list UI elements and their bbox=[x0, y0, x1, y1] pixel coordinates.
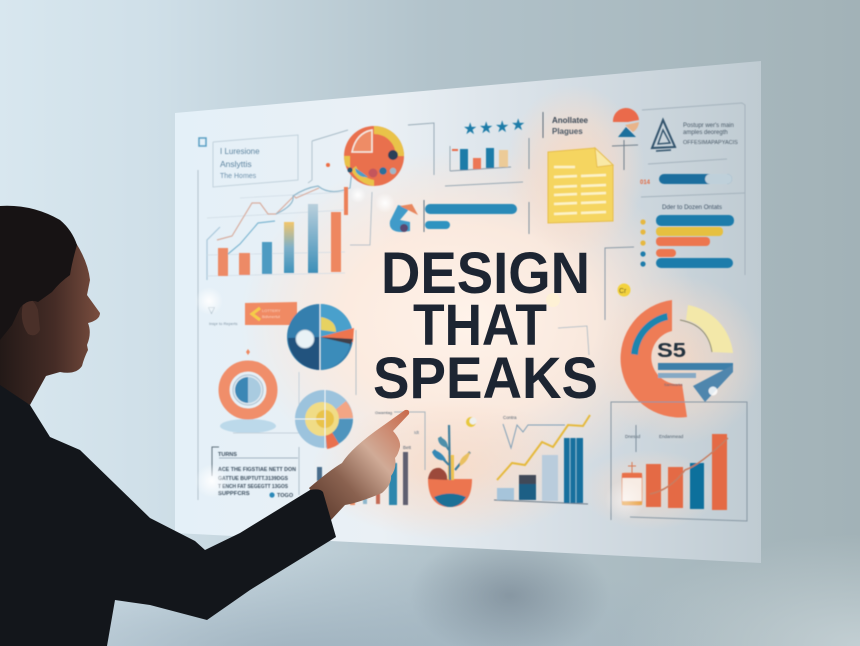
jacket bbox=[0, 385, 336, 646]
pie chart: blue bbox=[287, 304, 354, 370]
small yellow badge: Cr bbox=[619, 288, 627, 295]
panel: text notes: GATTUE BUPTUTT.3139DGS bbox=[218, 476, 288, 482]
panel: analytics heading bbox=[199, 135, 298, 187]
yellow document icon bbox=[548, 148, 613, 223]
annotation label: Plagues bbox=[552, 127, 583, 136]
potted plant illustration bbox=[428, 417, 477, 507]
rising growth chart bbox=[494, 415, 590, 504]
horizontal bar list bbox=[640, 193, 745, 268]
annotation label bbox=[543, 112, 589, 138]
donut chart: orange bbox=[220, 349, 299, 433]
poster sheet bbox=[175, 61, 765, 563]
bar chart with jar: Endanmead bbox=[659, 434, 684, 439]
small yellow badge bbox=[605, 247, 634, 320]
rating stars bbox=[463, 117, 525, 138]
radial chart bbox=[295, 389, 353, 449]
pie chart: top centre bbox=[308, 123, 434, 186]
decorative frame lines bbox=[198, 170, 589, 500]
blue icon and bars bbox=[390, 200, 529, 234]
panel: text notes: TOGO bbox=[277, 493, 294, 499]
panel: analytics heading: I Luresione bbox=[220, 147, 260, 156]
rating stars: ★ bbox=[511, 117, 525, 134]
hair bbox=[0, 206, 77, 340]
panel: text notes: TURNS bbox=[218, 452, 237, 458]
panel: text notes: ACE THE FIGSTIAE NETT DON bbox=[218, 467, 296, 473]
small pie icon bbox=[612, 108, 639, 170]
poster infographic widgets bbox=[198, 103, 747, 521]
title: THAT bbox=[413, 293, 547, 358]
large donut gauge: Samwarks bbox=[664, 382, 683, 387]
title: SPEAKS bbox=[373, 346, 598, 411]
person pointing bbox=[0, 206, 409, 646]
horizontal bar list: Dder to Dozen Ontats bbox=[662, 205, 722, 211]
small bar chart bbox=[445, 138, 529, 186]
title: DESIGN bbox=[381, 241, 590, 306]
panel: triangle logo note: Postupr wer's main bbox=[683, 123, 734, 129]
bars behind the hand: Gwamtag bbox=[375, 410, 392, 415]
bars behind the hand bbox=[317, 410, 425, 505]
panel: triangle logo note: OFFESIMAPAPYACIS bbox=[683, 140, 738, 146]
bar chart with jar bbox=[611, 402, 747, 521]
progress bar: 014 bbox=[640, 180, 651, 186]
panel: triangle logo note bbox=[642, 103, 745, 275]
hand bbox=[309, 410, 409, 520]
bar chart with jar: Dnessd bbox=[625, 434, 641, 439]
orange callout tag bbox=[208, 302, 297, 326]
bars behind the hand: Idt bbox=[414, 430, 420, 435]
panel: triangle logo note: amples deoregth bbox=[683, 130, 728, 136]
orange callout tag: Inspr to Reperts bbox=[209, 321, 237, 326]
rating stars: ★ bbox=[495, 119, 509, 136]
panel: text notes bbox=[212, 447, 299, 499]
rating stars: ★ bbox=[479, 120, 493, 137]
annotation label: Anollatee bbox=[552, 116, 589, 125]
panel: analytics heading: The Homes bbox=[220, 173, 257, 180]
line and bar chart bbox=[207, 170, 352, 280]
title bbox=[373, 241, 598, 411]
neck and face bbox=[0, 243, 100, 405]
panel: analytics heading: Anslyttis bbox=[220, 159, 252, 169]
progress bar bbox=[640, 174, 732, 186]
rating stars: ★ bbox=[463, 121, 477, 138]
orange callout tag: ▽ bbox=[208, 305, 215, 315]
large donut gauge: S5 bbox=[657, 340, 686, 362]
large donut gauge bbox=[621, 300, 733, 417]
orange callout tag: LOTTERY bbox=[262, 308, 281, 313]
light glows bbox=[195, 187, 645, 520]
panel: text notes: SUPPFCRS bbox=[218, 491, 250, 497]
bars behind the hand: Bett bbox=[403, 445, 412, 450]
orange callout tag: Bdlvnertut bbox=[262, 314, 281, 319]
panel: text notes: T ENCH FAT SEGEGTT 13GOS bbox=[218, 484, 288, 490]
rising growth chart: Contra bbox=[503, 415, 517, 420]
ear bbox=[22, 299, 40, 335]
